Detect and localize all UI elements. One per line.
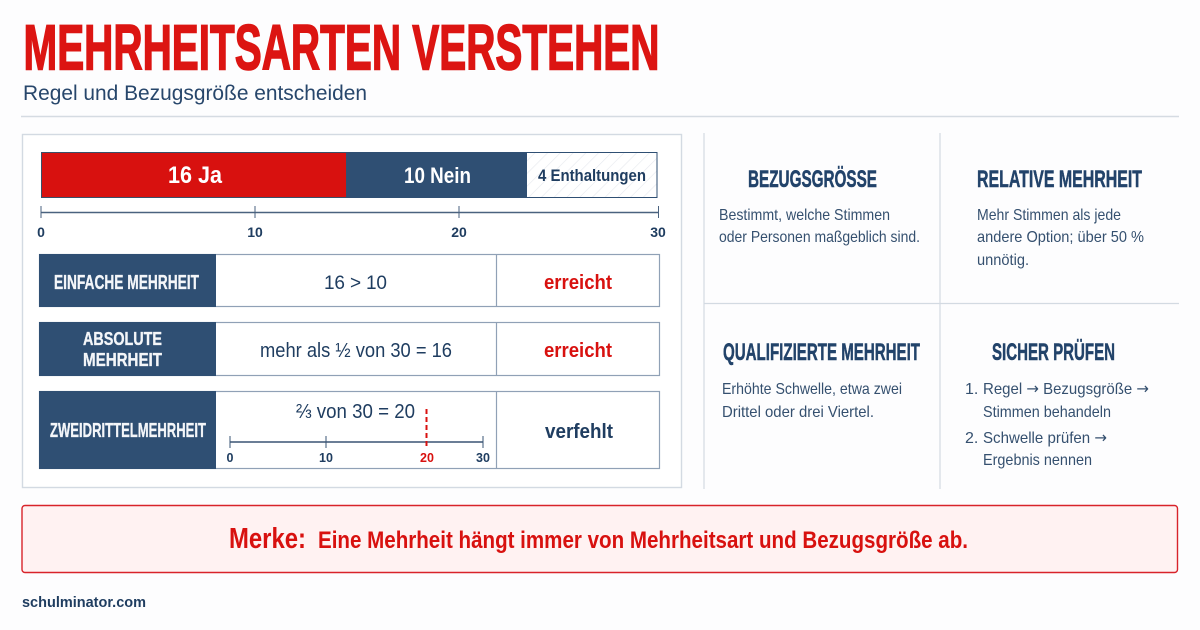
bar segment: 4 Enthaltungen: 4 Enthaltungen	[538, 166, 646, 185]
axis: 0 to 30: 20	[451, 224, 467, 240]
axis: 0 to 30: 30	[650, 224, 666, 240]
row: einfache Mehrheit: EINFACHE MEHRHEIT	[54, 272, 199, 294]
card: qualifizierte Mehrheit: Erhöhte Schwelle, etwa zwei	[722, 381, 902, 398]
mini axis with two-thirds threshold: 30	[476, 451, 490, 465]
card: qualifizierte Mehrheit	[722, 339, 920, 421]
callout: Merke	[22, 506, 1178, 572]
callout: Merke: Merke:	[229, 523, 306, 555]
card: sicher prüfen: 2.	[965, 430, 978, 447]
row: absolute Mehrheit	[39, 322, 660, 376]
card: sicher prüfen	[965, 339, 1149, 469]
card: sicher prüfen: 1.	[965, 381, 978, 398]
row: absolute Mehrheit: MEHRHEIT	[83, 350, 162, 370]
row: Zweidrittelmehrheit: verfehlt	[545, 421, 613, 443]
card: Bezugsgröße: BEZUGSGRÖSSE	[748, 166, 877, 193]
card: sicher prüfen: Regel → Bezugsgröße →	[983, 379, 1149, 398]
card: Bezugsgröße	[719, 166, 920, 246]
mini axis with two-thirds threshold: 0	[227, 451, 234, 465]
subtitle: Regel und Bezugsgröße entscheiden	[23, 82, 367, 105]
row: Zweidrittelmehrheit: ZWEIDRITTELMEHRHEIT	[50, 420, 206, 442]
row: einfache Mehrheit: 16 > 10	[324, 273, 387, 294]
bar segment: 4 Enthaltungen	[526, 152, 657, 198]
axis: 0 to 30: 10	[247, 224, 263, 240]
row: absolute Mehrheit: erreicht	[544, 340, 612, 362]
axis: 0 to 30	[37, 206, 666, 240]
mini axis with two-thirds threshold: 20	[420, 451, 434, 465]
card: relative Mehrheit	[977, 166, 1144, 269]
row: einfache Mehrheit: erreicht	[544, 272, 612, 294]
row: absolute Mehrheit: ABSOLUTE	[83, 329, 162, 349]
card: Bezugsgröße: oder Personen maßgeblich sind.	[719, 229, 920, 246]
card: relative Mehrheit: Mehr Stimmen als jede	[977, 207, 1121, 224]
bar segment: 16 Ja	[42, 152, 346, 198]
row: Zweidrittelmehrheit	[39, 391, 660, 469]
card: sicher prüfen: Schwelle prüfen →	[983, 428, 1107, 447]
stacked bar: votes	[42, 152, 657, 198]
card: qualifizierte Mehrheit: Drittel oder drei Viertel.	[722, 404, 874, 421]
info grid lines	[704, 133, 1179, 489]
card: Bezugsgröße: Bestimmt, welche Stimmen	[719, 207, 890, 224]
footer: source: schulminator.com	[22, 595, 146, 611]
title: MEHRHEITSARTEN VERSTEHEN	[24, 12, 660, 84]
mini axis with two-thirds threshold: 10	[319, 451, 333, 465]
callout: Merke: Eine Mehrheit hängt immer von Mehrheitsart und Bezugsgröße ab.	[318, 527, 968, 554]
panel: vote chart and majority rows	[22, 134, 682, 488]
card: sicher prüfen: Stimmen behandeln	[983, 404, 1111, 421]
axis: 0 to 30: 0	[37, 224, 45, 240]
card: sicher prüfen: SICHER PRÜFEN	[992, 339, 1115, 366]
row: einfache Mehrheit	[39, 254, 660, 307]
row: absolute Mehrheit: mehr als ½ von 30 = 16	[260, 340, 452, 362]
card: sicher prüfen: Ergebnis nennen	[983, 452, 1092, 469]
row: Zweidrittelmehrheit: ⅔ von 30 = 20	[296, 401, 415, 423]
bar segment: 16 Ja: 16 Ja	[168, 162, 223, 189]
mini axis with two-thirds threshold	[227, 409, 490, 465]
card: qualifizierte Mehrheit: QUALIFIZIERTE MEHRHEIT	[723, 339, 920, 366]
bar segment: 10 Nein	[347, 152, 526, 198]
bar segment: 10 Nein: 10 Nein	[404, 163, 471, 188]
card: relative Mehrheit: andere Option; über 50 %	[977, 229, 1144, 246]
card: relative Mehrheit: unnötig.	[977, 252, 1029, 269]
